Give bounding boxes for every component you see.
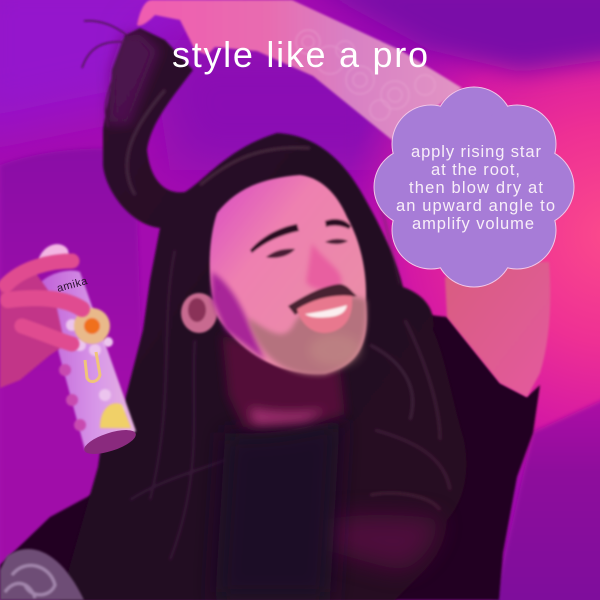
can pink patches: [59, 364, 86, 431]
cheek shadow: [212, 272, 265, 360]
flower outline: [374, 86, 574, 288]
ear: [181, 293, 217, 333]
title: style like a pro: [172, 34, 428, 75]
can sun graphic: [74, 308, 110, 344]
callout text: at the root,: [431, 161, 520, 179]
callout text: apply rising star: [411, 143, 542, 161]
callout text: [396, 143, 555, 233]
raised arm with tattoo: [137, 0, 462, 140]
can body: [40, 270, 136, 450]
callout text: an upward angle to: [396, 197, 555, 215]
loose strands at hand: [82, 21, 128, 127]
skin: [210, 175, 367, 374]
wine-tinted hair ends: [325, 515, 440, 570]
bottom-left tattooed arm: [0, 549, 84, 600]
tuft tint: [106, 30, 160, 125]
flower fill: [374, 88, 574, 286]
can brand: amika: [56, 275, 90, 295]
callout text: then blow dry at: [409, 179, 543, 197]
callout flower: [374, 86, 574, 288]
palm: [0, 265, 65, 388]
chin light: [309, 334, 361, 366]
teeth: [305, 305, 347, 318]
moustache: [288, 284, 357, 315]
can yellow swirl: [100, 403, 131, 428]
spray can: [39, 244, 138, 459]
can cap: [39, 244, 70, 270]
nose: [306, 243, 342, 290]
face: [181, 175, 367, 375]
callout text: amplify volume: [412, 215, 534, 233]
eyes: [266, 249, 295, 258]
neck: [222, 335, 345, 428]
can letter mark: [85, 352, 100, 382]
shirt chest: [215, 418, 340, 600]
fingers: [6, 261, 82, 344]
beard: [248, 296, 367, 375]
black t-shirt: [0, 315, 540, 600]
can bottom rim: [82, 425, 138, 459]
can scallop pattern: [66, 319, 125, 415]
lips: [297, 296, 352, 333]
long dark hair and lifted lock: [60, 21, 466, 600]
eyebrows: [250, 224, 299, 253]
right arm: [445, 262, 550, 397]
hand holding can: [0, 261, 82, 388]
hair highlights: [127, 90, 450, 560]
tattoo pattern: [296, 30, 435, 120]
